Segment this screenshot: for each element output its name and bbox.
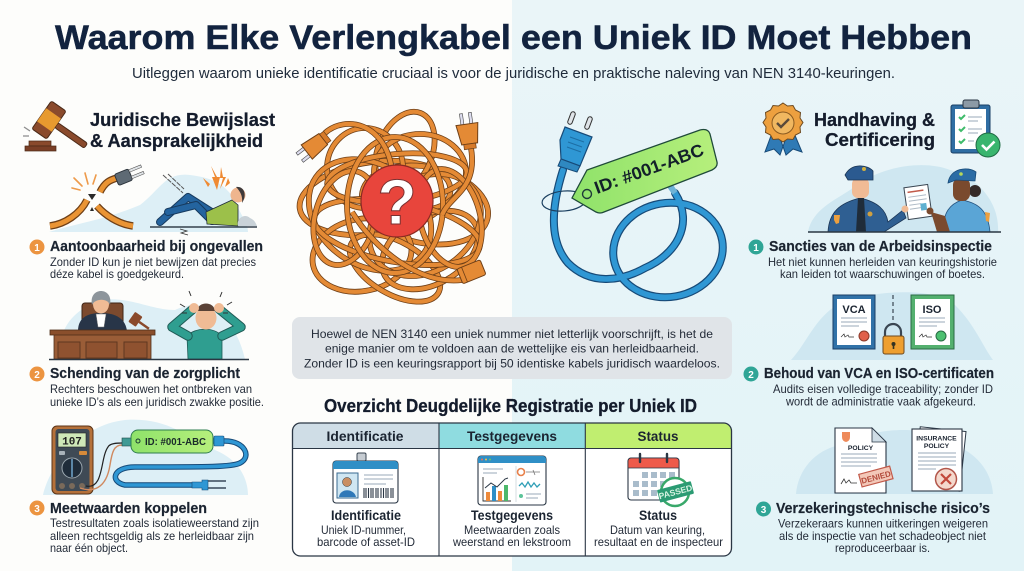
badge 3 <box>30 500 44 516</box>
section 1: aantoonbaarheid <box>30 238 263 281</box>
heading: Schending van de zorgplicht <box>50 365 240 382</box>
section 3: meetwaarden koppelen <box>30 500 259 555</box>
body text: Verzekeraars kunnen uitkeringen weigeren <box>778 517 988 531</box>
body text: Rechters beschouwen het ontbreken van <box>50 382 252 396</box>
badge 2: 2 <box>748 370 754 381</box>
left plug <box>294 129 333 165</box>
column: status: Status <box>638 428 679 444</box>
icon: ribbon badge <box>763 103 803 155</box>
illustration: insurance policies: INSURANCE <box>916 436 957 443</box>
body text: Het niet kunnen herleiden van keuringshistorie <box>768 255 997 269</box>
heading: juridische bewijslast: Juridische Bewijslast <box>90 110 275 130</box>
body text <box>50 255 256 281</box>
illustration: inspector officers <box>808 165 1001 232</box>
column: identificatie: Identificatie <box>326 428 404 444</box>
badge 2 <box>744 366 758 382</box>
illustration: multimeter and tagged cable: ID: #001-ABC <box>145 436 206 448</box>
heading: Verzekeringstechnische risico’s <box>776 500 990 517</box>
badge 1: 1 <box>34 243 40 254</box>
body text: naar één object. <box>50 541 128 555</box>
column: testgegevens <box>452 428 571 549</box>
body text: unieke ID’s als een juridisch zwakke positie. <box>50 395 264 409</box>
ID tag <box>572 130 717 213</box>
illustration: VCA and ISO certificates with lock: VCA <box>842 304 866 316</box>
illustration: broken cable and fallen person <box>49 164 257 235</box>
column: testgegevens: Testgegevens <box>471 508 553 523</box>
ID tag: ID: #001-ABC <box>592 140 707 198</box>
section 2: behoud certificaten <box>744 365 994 409</box>
illustration: insurance policies: POLICY <box>924 443 950 450</box>
illustration: judge and distressed person <box>49 291 249 360</box>
heading: handhaving <box>814 110 935 150</box>
heading: handhaving: Handhaving & <box>814 110 935 130</box>
column: testgegevens: weerstand en lekstroom <box>452 535 571 549</box>
icon: calendar with passed stamp: PASSED <box>658 483 693 501</box>
column: testgegevens: Meetwaarden zoals <box>464 523 560 537</box>
body text: déze kabel is goedgekeurd. <box>50 267 184 281</box>
illustration: insurance policies <box>796 427 993 494</box>
panel: handhaving en certificering <box>744 100 1001 555</box>
heading: juridische bewijslast: & Aansprakelijkheid <box>90 131 263 151</box>
illustration: blue cable with ID tag <box>541 114 730 306</box>
section 1: sancties <box>748 238 997 281</box>
illustration: insurance policies: DENIED <box>860 469 892 486</box>
illustration: VCA and ISO certificates with lock <box>791 292 993 360</box>
badge 3: 3 <box>761 505 767 516</box>
bottom connector <box>457 260 486 284</box>
section 3: verzekeringstechnische risico's <box>756 500 990 555</box>
question mark badge: ? <box>377 166 417 238</box>
plug <box>558 114 592 172</box>
title: Waarom Elke Verlengkabel een Uniek ID Moet Hebben <box>55 19 972 57</box>
table: deugdelijke registratie <box>292 423 732 556</box>
badge 2 <box>30 366 44 382</box>
heading: Sancties van de Arbeidsinspectie <box>769 238 992 255</box>
body text <box>773 382 993 409</box>
heading: Meetwaarden koppelen <box>50 500 207 517</box>
heading: juridische bewijslast <box>90 110 275 151</box>
body text: kan leiden tot waarschuwingen of boetes. <box>780 267 985 281</box>
illustration: insurance policies: POLICY <box>848 445 874 452</box>
icon: gavel <box>23 101 96 160</box>
illustration: VCA and ISO certificates with lock: ISO <box>923 304 942 316</box>
column: identificatie: Identificatie <box>331 508 401 523</box>
icon: test dashboard <box>478 456 546 505</box>
badge 3: 3 <box>34 504 40 515</box>
badge 3 <box>756 502 771 516</box>
section 2: schending zorgplicht <box>30 365 264 409</box>
column: status: Datum van keuring, <box>610 523 705 537</box>
body text: Testresultaten zoals isolatieweerstand zijn <box>50 516 259 530</box>
badge 1: 1 <box>753 243 759 254</box>
column: status: Status <box>639 508 677 523</box>
callout: NEN 3140 explanation: Hoewel de NEN 3140 een uniek nummer niet letterlijk voorschrijft, is het de <box>311 327 713 341</box>
illustration: tangled orange cable with question mark <box>287 103 501 316</box>
body text: reproduceerbaar is. <box>835 541 930 555</box>
column: status: resultaat en de inspecteur <box>594 535 723 549</box>
right plug <box>454 112 481 150</box>
badge 1 <box>748 240 764 254</box>
subtitle: Uitleggen waarom unieke identificatie cruciaal is voor de juridische en praktische naleving van NEN 3140-keuringen. <box>132 65 895 82</box>
callout: NEN 3140 explanation <box>292 317 732 379</box>
icon: ID badge <box>333 453 398 503</box>
icon: clipboard with check <box>951 100 1000 157</box>
panel: juridische bewijslast <box>23 101 275 555</box>
column: identificatie <box>317 428 415 549</box>
callout: NEN 3140 explanation: enige manier om te voldoen aan de wettelijke eis van herleidbaarheid. <box>325 342 699 356</box>
body text <box>778 517 988 555</box>
body text <box>50 516 259 555</box>
body text: wordt de administratie vaak afgekeurd. <box>785 395 976 409</box>
body text: als de inspectie van het schadeobject niet <box>779 529 987 543</box>
body text: Zonder ID kun je niet bewijzen dat precies <box>50 255 256 269</box>
badge 1 <box>30 240 44 254</box>
body text: Audits eisen volledige traceability; zonder ID <box>773 382 993 396</box>
body text: alleen rechtsgeldig als ze herleidbaar zijn <box>50 529 254 543</box>
heading: Aantoonbaarheid bij ongevallen <box>50 238 263 255</box>
column: testgegevens: Testgegevens <box>467 428 557 444</box>
badge 2: 2 <box>34 370 40 381</box>
column: status <box>594 428 723 549</box>
body text <box>50 382 264 409</box>
callout: NEN 3140 explanation: Zonder ID is een keuringsrapport bij 50 identiske kabels juridisch waardeloos. <box>304 356 720 370</box>
column: identificatie: Uniek ID-nummer, <box>321 523 406 537</box>
heading: Behoud van VCA en ISO-certificaten <box>764 365 994 382</box>
illustration: multimeter and tagged cable: 107 <box>62 436 82 448</box>
column: identificatie: barcode of asset-ID <box>317 535 415 549</box>
heading: overzicht: Overzicht Deugdelijke Registratie per Uniek ID <box>324 396 697 416</box>
question mark badge <box>361 165 433 238</box>
body text <box>768 255 997 281</box>
illustration: multimeter and tagged cable <box>43 420 248 495</box>
heading: handhaving: Certificering <box>825 130 935 150</box>
